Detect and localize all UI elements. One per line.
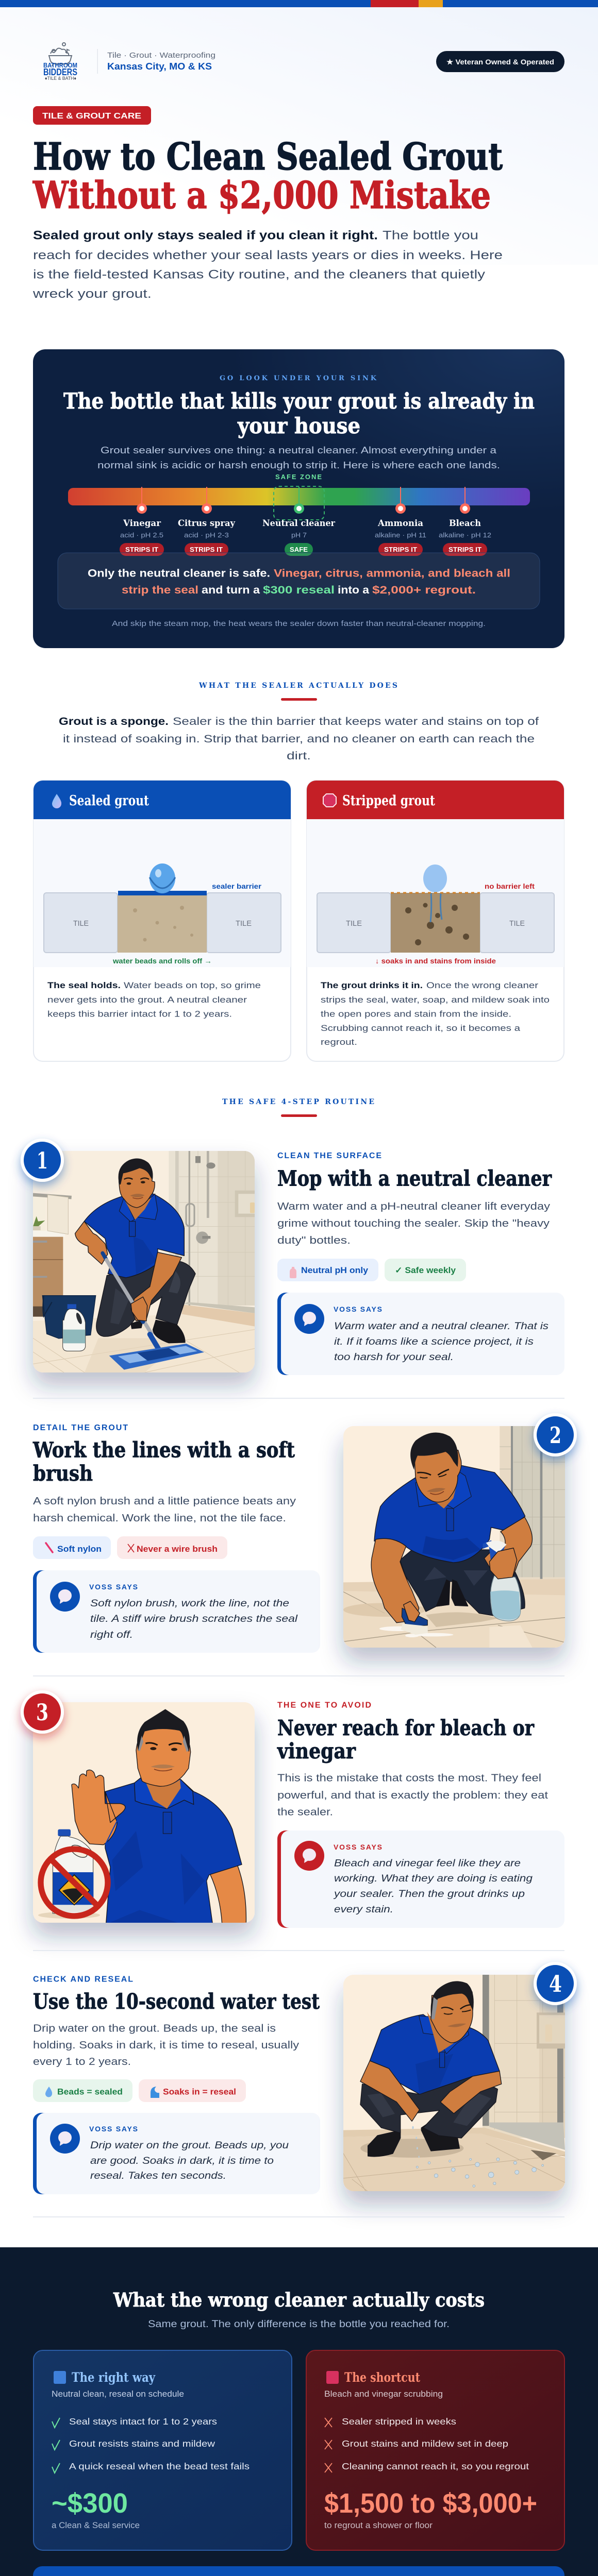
step 1 tag: safe weekly: ✓ Safe weekly — [395, 1266, 456, 1275]
stripped grout text: strips the seal, water, soap, and mildew soak into — [321, 995, 550, 1005]
sealer intro text: Grout is a sponge. — [59, 716, 169, 727]
callout: only neutral is safe: and turn a — [202, 584, 260, 596]
step 4 number badge: 4 — [549, 1971, 562, 1997]
panel: pH scale under the sink — [33, 349, 564, 648]
icon: water drop — [52, 794, 61, 808]
tag: tile and grout care — [33, 106, 151, 125]
heading: sealed grout: Sealed grout — [69, 793, 149, 809]
stripped grout text: Scrubbing cannot reach it, so it becomes a — [321, 1024, 521, 1033]
section heading: what the sealer does — [198, 682, 397, 701]
marker: ammonia: alkaline · pH 11 — [375, 531, 426, 539]
title — [32, 134, 503, 217]
step 3 heading — [277, 1716, 535, 1764]
panel: cost comparison — [0, 2247, 598, 2576]
panel: sealed grout — [34, 781, 291, 1061]
checklist: right way: A quick reseal when the bead test fails — [69, 2461, 250, 2471]
step 3 kicker: THE ONE TO AVOID — [277, 1701, 371, 1709]
top colour bar — [0, 0, 598, 7]
step 1 body: grime without touching the sealer. Skip the "heavy — [277, 1218, 550, 1229]
step 3 Voss callout: VOSS SAYS — [334, 1843, 382, 1851]
callout: only neutral is safe: into a — [338, 584, 369, 596]
logo: Bathroom Bidders tub — [43, 43, 77, 81]
step 2 Voss callout: right off. — [90, 1630, 133, 1640]
illustration: water bead test — [343, 1975, 565, 2191]
intro text — [32, 229, 503, 301]
checklist: shortcut: Grout stains and mildew set in deep — [342, 2438, 508, 2449]
callout: only neutral is safe: $2,000+ regrout. — [372, 584, 476, 596]
checklist: right way — [52, 2416, 250, 2473]
step 1 Voss callout — [277, 1293, 564, 1375]
card: the right way: a Clean & Seal service — [52, 2521, 140, 2530]
sealer intro text: it instead of soaking in. Strip that barrier, and no cleaner on earth can reach the — [63, 733, 535, 745]
step 4 heading: Use the 10-second water test — [33, 1989, 320, 2014]
step 3 Voss callout: your sealer. Then the grout drinks up — [333, 1889, 525, 1900]
step 1 body: duty" bottles. — [277, 1235, 351, 1246]
step 4 Voss callout — [33, 2113, 320, 2194]
sealed grout text — [47, 981, 261, 1019]
cost heading: What the wrong cleaner actually costs — [113, 2289, 485, 2311]
stripped grout text: Once the wrong cleaner — [426, 981, 539, 990]
step 2 heading — [32, 1437, 295, 1486]
callout: only neutral is safe: Only the neutral cleaner is safe. — [88, 568, 270, 579]
card: the shortcut: $1,500 to $3,000+ — [324, 2488, 537, 2519]
panel heading: your house — [237, 413, 360, 438]
marker: citrus spray: Citrus spray — [178, 518, 236, 529]
veteran badge — [436, 51, 564, 72]
card: the shortcut: The shortcut — [344, 2370, 420, 2385]
panel intro: Grout sealer survives one thing: a neutral cleaner. Almost everything under a — [101, 445, 497, 455]
sealed grout text: never gets into the grout. A neutral cleaner — [47, 995, 247, 1005]
sealer intro text: Sealer is the thin barrier that keeps water and stains on top of — [173, 716, 539, 727]
section heading: safe routine: THE SAFE 4-STEP ROUTINE — [222, 1098, 374, 1106]
callout: only neutral is safe — [58, 553, 540, 609]
step 4 body: Drip water on the grout. Beads up, the seal is — [33, 2023, 276, 2034]
step 4 Voss callout: are good. Soaks in dark, it is time to — [90, 2156, 274, 2166]
step 2 body: A soft nylon brush and a little patience beats any — [33, 1496, 296, 1507]
step 1 heading: Mop with a neutral cleaner — [277, 1166, 552, 1191]
logo: Bathroom Bidders tub: BIDDERS — [43, 67, 77, 77]
step 2 Voss callout: tile. A stiff wire brush scratches the seal — [90, 1614, 298, 1624]
card: the right way: The right way — [72, 2370, 156, 2385]
panel heading: The bottle that kills your grout is already in — [63, 388, 535, 414]
step 2 Voss callout: Soft nylon brush, work the line, not the — [90, 1598, 289, 1609]
step 4 Voss callout: reseal. Takes ten seconds. — [90, 2171, 226, 2181]
marker: neutral cleaner — [262, 487, 336, 556]
sealed grout text: Water beads on top, so grime — [124, 981, 261, 990]
diagram: stripped joint: no barrier left — [485, 882, 535, 890]
step 3 Voss callout: Bleach and vinegar feel like they are — [334, 1858, 521, 1869]
marker: bleach: alkaline · pH 12 — [439, 531, 491, 539]
card: the shortcut — [306, 2350, 564, 2550]
diagram: stripped joint: TILE — [346, 919, 362, 928]
stripped grout text — [321, 981, 550, 1047]
sealed grout text: The seal holds. — [47, 981, 121, 990]
step 3 number badge — [21, 1690, 64, 1734]
step 3 heading: vinegar — [277, 1739, 356, 1764]
step 3 Voss callout: every stain. — [334, 1904, 393, 1915]
diagram: stripped joint — [317, 865, 554, 965]
header tagline — [107, 51, 215, 72]
step 3 body — [277, 1772, 549, 1818]
step 2 Voss callout — [33, 1570, 320, 1653]
section heading: what the sealer does: WHAT THE SEALER ACTUALLY DOES — [198, 682, 397, 690]
step 4 body: holding. Soaks in dark, it is time to reseal, usually — [33, 2040, 299, 2051]
marker: neutral cleaner: pH 7 — [291, 531, 307, 539]
marker: ammonia: STRIPS IT — [384, 546, 417, 553]
step 1 number badge — [21, 1139, 64, 1182]
marker: ammonia — [375, 487, 426, 556]
sealed grout text: keeps this barrier intact for 1 to 2 years. — [47, 1010, 232, 1019]
step 3 body: powerful, and that is exactly the problem: they eat — [277, 1790, 549, 1801]
step 1 tag: safe weekly — [385, 1259, 466, 1281]
step 1 Voss callout: Warm water and a neutral cleaner. That is — [334, 1321, 549, 1332]
illustration: stop hand and banned bleach — [33, 1702, 255, 1924]
step 3 heading: Never reach for bleach or — [277, 1716, 535, 1740]
intro text: The bottle you — [383, 229, 478, 242]
sealer intro text — [59, 716, 539, 762]
steam mop footnote: And skip the steam mop, the heat wears the sealer down faster than neutral-cleaner mopping. — [112, 619, 486, 628]
marker: bleach: STRIPS IT — [448, 546, 481, 553]
step 3 body: the sealer. — [277, 1806, 333, 1818]
card: the right way: Neutral clean, reseal on schedule — [52, 2389, 184, 2399]
step 4 tag: soaks: Soaks in = reseal — [163, 2088, 236, 2097]
intro text: reach for decides whether your seal lasts years or dies in weeks. Here — [33, 248, 503, 262]
step 2 body — [33, 1496, 296, 1524]
intro text: is the field-tested Kansas City routine, and the cleaners that quietly — [33, 268, 485, 281]
diagram: stripped joint: ↓ soaks in and stains from inside — [375, 957, 496, 965]
step 4 kicker: CHECK AND RESEAL — [33, 1975, 133, 1984]
cost subheading: Same grout. The only difference is the bottle you reached for. — [148, 2319, 450, 2330]
card: the shortcut: to regrout a shower or floor — [324, 2521, 433, 2530]
heading: stripped grout: Stripped grout — [342, 793, 435, 809]
callout: only neutral is safe: Vinegar, citrus, ammonia, and bleach all — [274, 568, 510, 579]
callout band: reseal or regrout — [33, 2566, 564, 2576]
diagram: stripped joint: TILE — [509, 919, 525, 928]
veteran badge: ★ Veteran Owned & Operated — [446, 58, 554, 66]
step 1 kicker: CLEAN THE SURFACE — [277, 1151, 381, 1160]
marker: bleach — [439, 487, 491, 556]
safe zone label: SAFE ZONE — [275, 473, 322, 481]
title: How to Clean Sealed Grout — [33, 134, 503, 178]
intro text: Sealed grout only stays sealed if you clean it right. — [33, 229, 378, 242]
marker: ammonia: Ammonia — [377, 518, 423, 529]
marker: vinegar: STRIPS IT — [125, 546, 158, 553]
step 2 number badge — [534, 1413, 577, 1456]
title: Without a $2,000 Mistake — [32, 173, 491, 217]
step 2 number badge: 2 — [550, 1422, 561, 1449]
step 2 tag: never wire — [117, 1536, 227, 1559]
step 1 Voss callout: too harsh for your seal. — [334, 1352, 454, 1363]
marker: neutral cleaner: Neutral cleaner — [262, 518, 336, 529]
sealer intro text: dirt. — [287, 750, 311, 762]
checklist: right way: Seal stays intact for 1 to 2 years — [69, 2416, 217, 2427]
step 3 number badge: 3 — [36, 1700, 48, 1726]
step 2 tag: soft nylon — [33, 1536, 111, 1559]
brand header — [43, 43, 564, 81]
panel eyebrow: GO LOOK UNDER YOUR SINK — [220, 375, 377, 382]
step 1 number badge: 1 — [37, 1148, 48, 1174]
stripped grout text: The grout drinks it in. — [321, 981, 423, 990]
marker: citrus spray: acid · pH 2-3 — [184, 531, 229, 539]
step 1 tag: neutral pH: Neutral pH only — [301, 1266, 369, 1275]
step 2 heading: brush — [33, 1461, 93, 1486]
card: the right way — [34, 2350, 292, 2550]
diagram: sealed joint — [44, 863, 281, 965]
panel intro: normal sink is acidic or harsh enough to strip it. Here is where each one lands. — [97, 460, 500, 470]
step 1 Voss callout: VOSS SAYS — [334, 1305, 382, 1313]
marker: citrus spray: STRIPS IT — [190, 546, 223, 553]
step 2 tag: soft nylon: Soft nylon — [57, 1545, 102, 1554]
step 2 heading: Work the lines with a soft — [32, 1437, 295, 1462]
step 4 body — [33, 2023, 299, 2067]
tag: tile and grout care: TILE & GROUT CARE — [42, 112, 141, 121]
marker: neutral cleaner: SAFE — [290, 546, 308, 553]
illustration: mopping with neutral cleaner — [33, 1151, 255, 1372]
step 1 panel — [21, 1139, 564, 1375]
header tagline: Tile · Grout · Waterproofing — [107, 51, 215, 60]
marker: bleach: Bleach — [449, 518, 481, 529]
step 4 Voss callout: VOSS SAYS — [89, 2125, 138, 2133]
safe zone frame — [274, 486, 324, 520]
callout: only neutral is safe: strip the seal — [122, 584, 198, 596]
illustration: scrubbing grout with brush — [343, 1426, 565, 1648]
stripped grout text: the open pores and stain from the inside. — [321, 1010, 511, 1019]
icon: stop sign — [323, 794, 336, 807]
header tagline: Kansas City, MO & KS — [107, 61, 212, 72]
step 2 kicker: DETAIL THE GROUT — [33, 1423, 128, 1432]
logo: Bathroom Bidders tub: ♦TILE & BATH♦ — [45, 76, 76, 81]
step 3 Voss callout — [277, 1831, 564, 1928]
card: the shortcut: Bleach and vinegar scrubbing — [324, 2389, 443, 2399]
checklist: right way: Grout resists stains and mildew — [69, 2438, 215, 2449]
step 3 body: This is the mistake that costs the most. They feel — [277, 1772, 541, 1784]
step 1 body — [277, 1201, 550, 1246]
step 4 number badge — [534, 1962, 577, 2005]
checklist: shortcut: Cleaning cannot reach it, so you regrout — [342, 2461, 529, 2471]
diagram: sealed joint: sealer barrier — [212, 882, 262, 890]
step 4 tag: soaks — [139, 2079, 246, 2102]
diagram: sealed joint: TILE — [73, 919, 89, 928]
step 2 tag: never wire: Never a wire brush — [137, 1545, 218, 1554]
step 3 Voss callout: working. What they are doing is eating — [334, 1873, 533, 1884]
step 2 Voss callout: VOSS SAYS — [89, 1583, 138, 1591]
marker: vinegar: acid · pH 2.5 — [120, 531, 163, 539]
panel heading — [63, 388, 535, 438]
step 1 Voss callout: it. If it foams like a science project, it is — [334, 1336, 534, 1347]
marker: citrus spray — [178, 487, 236, 556]
step 4 tag: beads — [33, 2079, 132, 2102]
step 4 tag: beads: Beads = sealed — [57, 2088, 123, 2097]
marker: vinegar — [120, 487, 164, 556]
section heading: safe routine — [222, 1098, 374, 1117]
logo: Bathroom Bidders tub: BATHROOM — [43, 61, 77, 69]
step 3 panel — [21, 1690, 564, 1928]
step 1 body: Warm water and a pH-neutral cleaner lift everyday — [277, 1201, 550, 1212]
checklist: shortcut — [325, 2416, 529, 2472]
intro text: wreck your grout. — [32, 287, 152, 301]
step 2 body: harsh chemical. Work the line, not the tile face. — [33, 1513, 286, 1524]
card: the right way: ~$300 — [52, 2488, 128, 2519]
panel: stripped grout — [307, 781, 564, 1061]
step 1 tag: neutral pH — [277, 1259, 378, 1281]
hero background tint — [0, 7, 598, 265]
step 4 body: every 1 to 2 years. — [33, 2056, 131, 2067]
marker: vinegar: Vinegar — [123, 518, 161, 529]
pH gradient bar — [68, 488, 530, 505]
step 4 panel — [33, 1962, 577, 2194]
panel intro — [97, 445, 500, 470]
step 2 panel — [32, 1413, 577, 1653]
stripped grout text: regrout. — [321, 1038, 357, 1047]
diagram: sealed joint: water beads and rolls off → — [112, 957, 212, 965]
step 4 Voss callout: Drip water on the grout. Beads up, you — [90, 2140, 289, 2151]
diagram: sealed joint: TILE — [236, 919, 252, 928]
checklist: shortcut: Sealer stripped in weeks — [342, 2416, 456, 2427]
callout: only neutral is safe: $300 reseal — [263, 584, 335, 596]
